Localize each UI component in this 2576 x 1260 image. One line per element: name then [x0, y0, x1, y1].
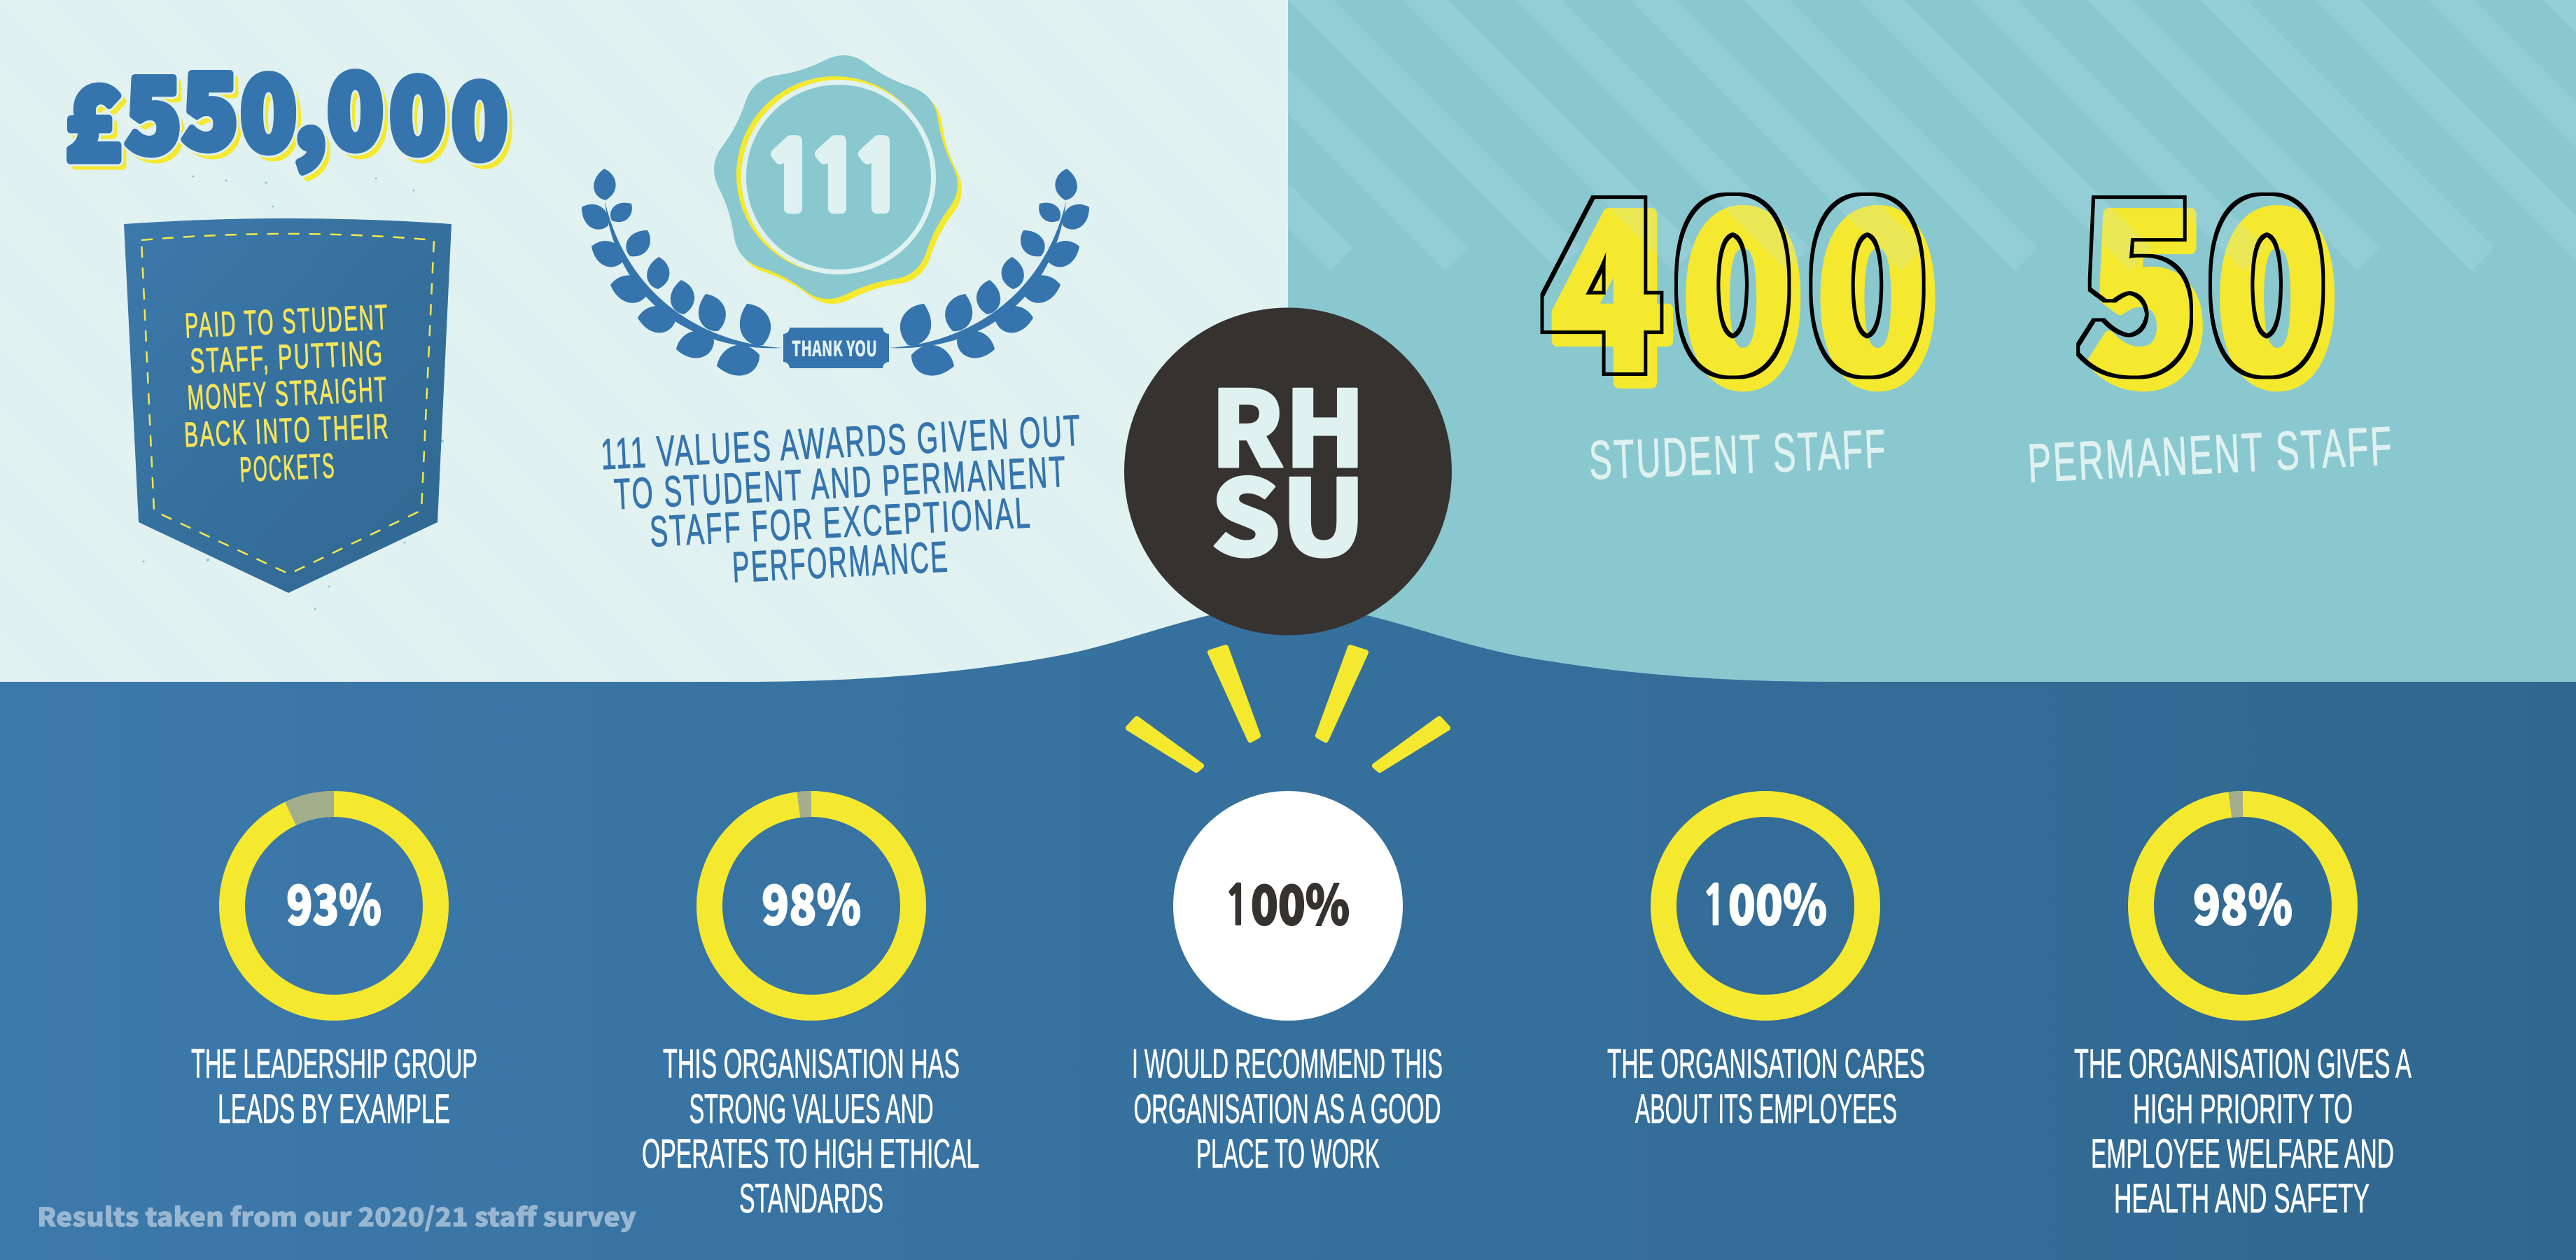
icon: yellow rays [1128, 648, 1448, 770]
stat: 93% leadership: 93% [286, 862, 382, 941]
text block: values awards: STAFF FOR EXCEPTIONAL [649, 489, 1032, 556]
stat: 98% welfare: HIGH PRIORITY TO [2133, 1086, 2353, 1132]
seal number: 111 [763, 132, 906, 223]
pocket text: PAID TO STUDENT [184, 298, 390, 345]
figure: 50 yellow fill: 50 [2088, 121, 2337, 448]
badge: thank you [783, 328, 889, 368]
stat: 100% recommend: I WOULD RECOMMEND THIS [1132, 1042, 1443, 1086]
background: teal right panel [1288, 0, 2576, 700]
icon: laurel left branch [575, 168, 782, 382]
footnote: survey source: Results taken from our 2020/21 staff survey [37, 1196, 636, 1234]
logo: RHSU circle: RH [1210, 346, 1366, 498]
stat: 98% values: THIS ORGANISATION HAS [663, 1042, 960, 1086]
stat: 98% values: 98% [762, 862, 861, 941]
stat: 100% cares: ABOUT ITS EMPLOYEES [1635, 1086, 1897, 1132]
speckles around pocket [132, 175, 444, 610]
headline figure: £550,000: £550,000 [65, 32, 507, 190]
seal ring [743, 83, 934, 272]
stat: 100% cares [1607, 804, 1925, 1132]
seal body [714, 55, 958, 299]
background: faint stripes on left panel [0, 0, 1288, 700]
decorative diagonal stripes [1288, 0, 2576, 271]
stat: 100% cares: 100% [1701, 862, 1827, 941]
figure: 400 yellow fill: 400 [1553, 121, 1938, 448]
stat: 100% cares: THE ORGANISATION CARES [1607, 1042, 1925, 1086]
stat: 98% values: OPERATES TO HIGH ETHICAL [642, 1131, 979, 1177]
seal yellow inner crescent [736, 76, 934, 274]
panel: pocket [124, 175, 451, 610]
pocket text [183, 298, 391, 489]
pocket text: MONEY STRAIGHT [186, 370, 389, 417]
logo: RHSU circle: SU [1210, 435, 1366, 587]
stat: 93% leadership: LEADS BY EXAMPLE [218, 1086, 450, 1132]
background: light left panel [0, 0, 1288, 700]
logo: RHSU circle [1124, 308, 1452, 636]
panel: lower blue band with wave [0, 610, 2576, 1260]
figure: 400 black outline: 400 [1542, 108, 1927, 435]
figure: 50 black outline: 50 [2078, 108, 2327, 435]
stat: 100% recommend: 100% [1224, 862, 1350, 941]
stat: 98% welfare: HEALTH AND SAFETY [2114, 1176, 2370, 1222]
seal yellow shadow [718, 60, 962, 304]
stat: 98% values [642, 804, 979, 1222]
label: student staff: STUDENT STAFF [1588, 417, 1889, 491]
text block: values awards: TO STUDENT AND PERMANENT [613, 448, 1068, 519]
pocket shape [124, 218, 451, 593]
headline figure: £550,000: £550,000 [65, 32, 507, 190]
icon: laurel right branch [889, 168, 1096, 382]
stat: 100% recommend: PLACE TO WORK [1196, 1131, 1380, 1177]
text block: values awards: PERFORMANCE [731, 533, 951, 592]
badge: thank you: THANK YOU [792, 332, 877, 363]
stat: 98% values: STRONG VALUES AND [689, 1086, 934, 1132]
stat: 93% leadership [191, 804, 477, 1132]
text block: values awards: 111 VALUES AWARDS GIVEN OUT [600, 407, 1083, 479]
stat: 98% welfare: 98% [2193, 862, 2292, 941]
stat: 98% welfare [2074, 804, 2412, 1222]
stat: 93% leadership: THE LEADERSHIP GROUP [191, 1042, 477, 1086]
stat: 100% recommend [1132, 791, 1443, 1177]
stat: 98% values: STANDARDS [739, 1176, 883, 1222]
icon: award seal with 111 [714, 55, 962, 304]
text block: values awards [600, 407, 1083, 592]
pocket stitching [141, 234, 434, 574]
stat: 100% recommend: ORGANISATION AS A GOOD [1134, 1086, 1441, 1132]
pocket text: POCKETS [239, 446, 337, 489]
pocket text: STAFF, PUTTING [189, 333, 385, 381]
pocket text: BACK INTO THEIR [183, 407, 391, 454]
headline figure: £550,000: £550,000 [70, 38, 512, 195]
